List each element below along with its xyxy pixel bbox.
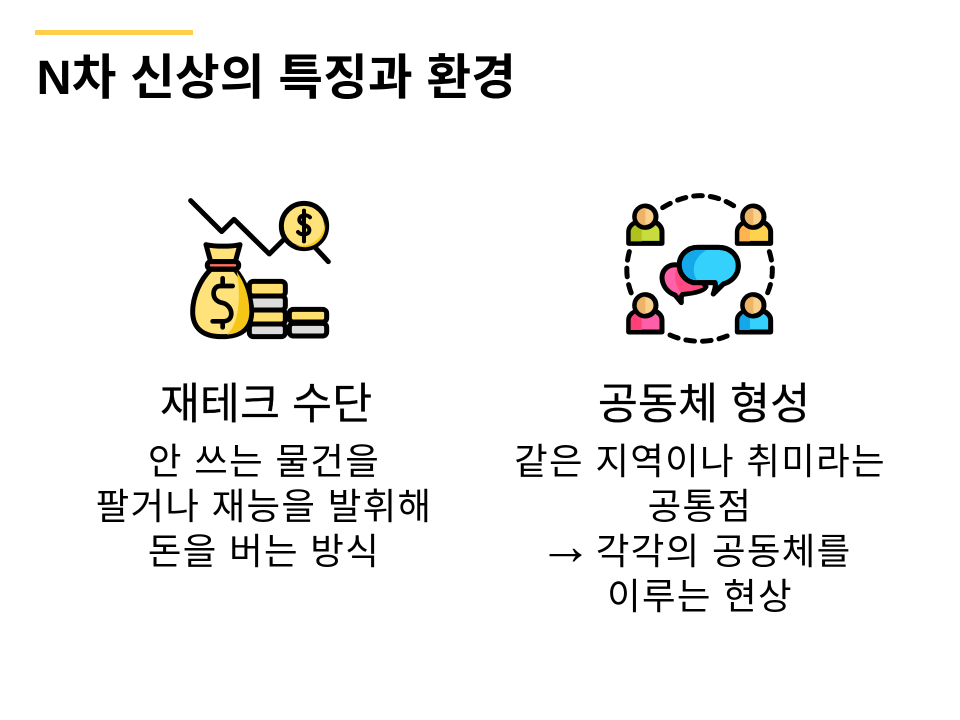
left body text: 돈을 버는 방식	[148, 531, 380, 572]
icon: community with speech bubbles	[624, 193, 775, 344]
blue speech bubble	[679, 247, 738, 294]
left body text	[96, 441, 432, 572]
right body text: 이루는 현상	[607, 576, 793, 617]
left body text: 팔거나 재능을 발휘해	[96, 486, 432, 527]
person bottom-right	[737, 295, 771, 332]
money bag	[193, 245, 252, 337]
right heading: 공동체 형성	[598, 381, 810, 429]
person top-right	[737, 206, 771, 243]
falling trend line	[191, 201, 283, 254]
accent bar	[35, 30, 193, 35]
right body text	[514, 441, 886, 617]
left heading: 재테크 수단	[160, 381, 372, 429]
icon: money bag with coins and falling chart	[188, 198, 331, 340]
magnifier with dollar	[281, 203, 328, 262]
right body text: 같은 지역이나 취미라는	[514, 441, 886, 482]
right body text: 공통점	[648, 486, 752, 527]
pink speech bubble	[662, 265, 706, 303]
person top-left	[629, 206, 662, 243]
dashed ring	[663, 196, 737, 208]
right body text: → 각각의 공동체를	[538, 516, 852, 576]
coin stack right	[289, 309, 327, 336]
coin stack left	[249, 281, 285, 337]
left body text: 안 쓰는 물건을	[148, 441, 380, 482]
person bottom-left	[629, 295, 662, 332]
title: N차 신상의 특징과 환경	[36, 51, 516, 105]
